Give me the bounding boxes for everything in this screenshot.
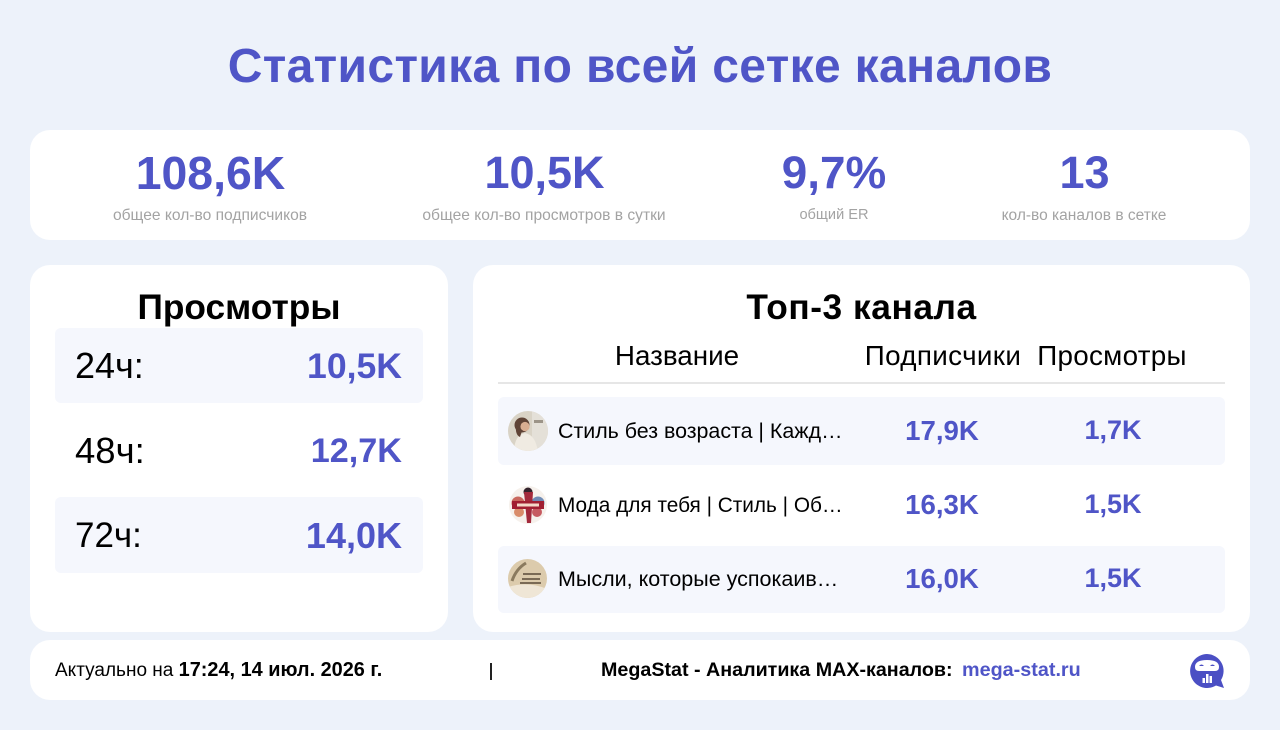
row: channel 2: 16,3K xyxy=(905,489,979,520)
icon: channel 2 avatar xyxy=(509,486,547,524)
heading: views: Просмотры xyxy=(138,288,340,327)
stat: subscribers: общее кол-во подписчиков xyxy=(113,207,307,224)
row: channel 3: 1,5K xyxy=(1084,563,1142,593)
panel: footer xyxy=(30,640,1250,700)
link: website: mega-stat.ru xyxy=(962,659,1081,681)
row: 48h: 48ч: xyxy=(75,430,145,471)
row: 72h xyxy=(55,497,423,573)
title: Статистика по всей сетке каналов xyxy=(228,40,1052,93)
row: channel 3 xyxy=(498,546,1225,613)
table header: Подписчики xyxy=(865,340,1021,371)
stat: channels: 13 xyxy=(1059,147,1110,198)
icon: MegaStat logo xyxy=(1190,654,1224,688)
row: 72h: 72ч: xyxy=(75,516,142,555)
row: 48h xyxy=(75,430,402,471)
panel: summary stats xyxy=(30,130,1250,240)
table header: Название xyxy=(615,340,739,371)
row: channel 2 xyxy=(509,486,1142,524)
divider bar xyxy=(490,663,492,680)
stat: channels: кол-во каналов в сетке xyxy=(1002,207,1166,224)
text: branding: MegaStat - Аналитика MAX-каналов: xyxy=(601,659,953,681)
stat: daily views: 10,5K xyxy=(484,147,605,198)
row: channel 2: 1,5K xyxy=(1084,489,1142,519)
stat: subscribers: 108,6K xyxy=(136,147,285,199)
row: 24h: 10,5K xyxy=(307,346,402,386)
row: 24h: 24ч: xyxy=(75,345,144,386)
row: channel 1: 17,9K xyxy=(905,415,979,446)
heading: top 3: Топ-3 канала xyxy=(746,288,977,327)
row: 48h: 12,7K xyxy=(311,432,402,470)
row: channel 3: 16,0K xyxy=(905,563,979,594)
stat: ER: общий ER xyxy=(799,207,869,223)
panel: views xyxy=(30,265,448,632)
row: channel 2: Мода для тебя | Стиль | Об… xyxy=(558,494,843,517)
panel: top 3 channels xyxy=(473,265,1250,632)
stat: subscribers xyxy=(113,147,307,224)
stat: ER: 9,7% xyxy=(782,147,886,198)
table header xyxy=(498,340,1225,384)
row: channel 1: Стиль без возраста | Кажд… xyxy=(558,419,842,443)
stat: channels xyxy=(1002,147,1166,224)
stat: ER xyxy=(782,147,886,223)
stat: daily views xyxy=(422,147,666,224)
row: 72h: 14,0K xyxy=(306,515,402,556)
row: channel 1 xyxy=(498,397,1225,465)
table header: Просмотры xyxy=(1037,340,1187,371)
row: channel 1: 1,7K xyxy=(1084,415,1142,445)
text: updated at: Актуально на 17:24, 14 июл. 2026 г. xyxy=(55,659,382,681)
icon: channel 3 avatar xyxy=(508,559,547,598)
row: 24h xyxy=(55,328,423,403)
stat: daily views: общее кол-во просмотров в сутки xyxy=(422,207,666,224)
icon: channel 1 avatar xyxy=(508,411,548,451)
row: channel 3: Мысли, которые успокаив… xyxy=(558,567,838,591)
